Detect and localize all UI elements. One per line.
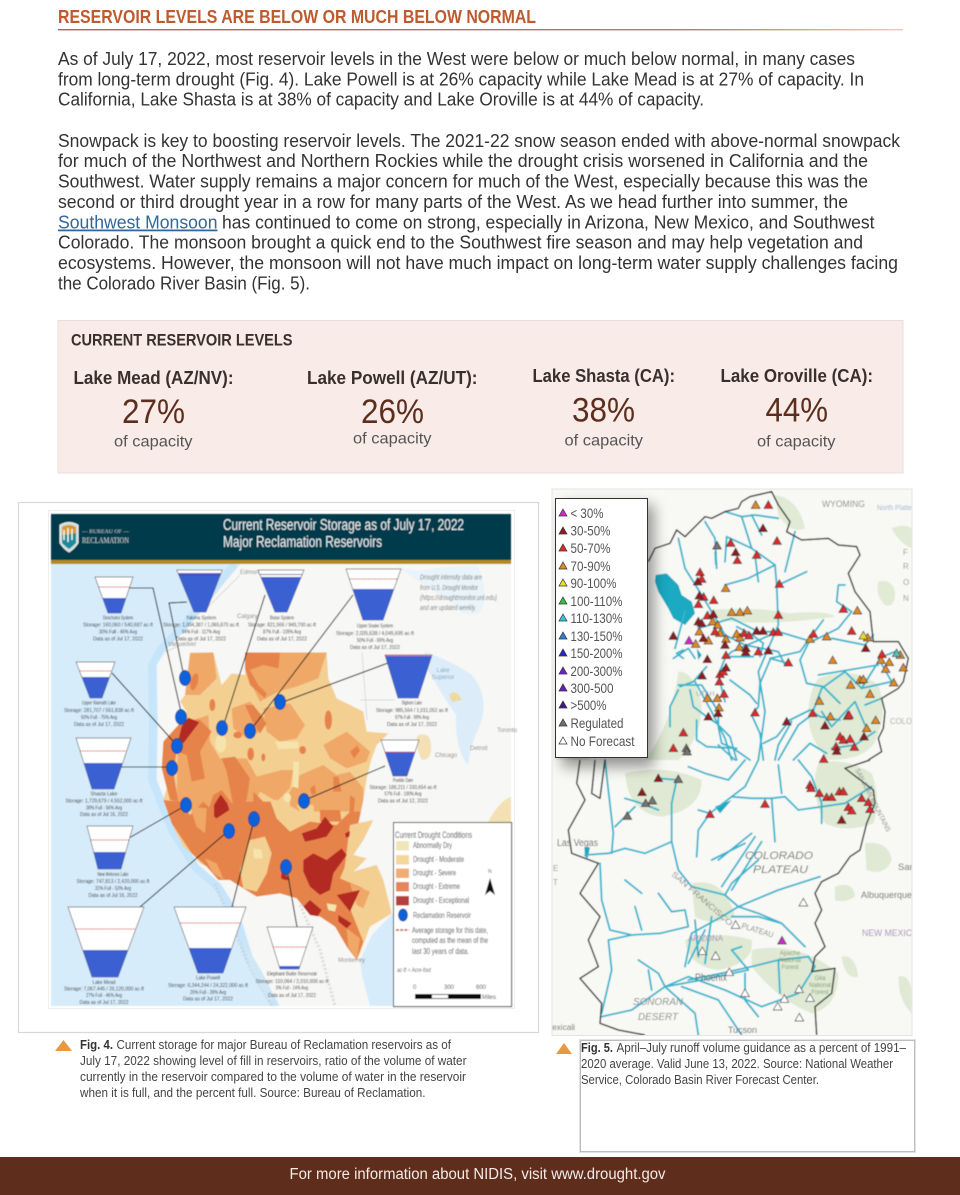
figure 4 caption: July 17, 2022 showing level of fill in reservoirs, ratio of the volume of water — [80, 1054, 466, 1068]
figure 5: runoff volume map — [552, 489, 915, 1036]
funnel: Upper Snake System: Data as of Jul 17, 2022 — [350, 645, 400, 651]
map place names: Forest — [781, 965, 799, 971]
legend: current drought conditions: Drought - Moderate — [413, 854, 464, 864]
map place names: N — [903, 594, 909, 603]
funnel: Upper Snake System: 50% Full - 69% Avg — [357, 638, 393, 644]
legend: current drought conditions: Current Drought Conditions — [395, 830, 472, 840]
drought data note: (https://droughtmonitor.unl.edu) — [420, 595, 497, 602]
legend: current drought conditions: Miles — [482, 995, 496, 1001]
funnel: Deschutes System: Storage: 160,060 / 540,687 ac-ft — [83, 622, 153, 628]
funnel: Upper Klamath Lake: Upper Klamath Lake — [82, 700, 116, 706]
funnel: Upper Klamath Lake: Storage: 281,707 / 561,838 ac-ft — [64, 708, 134, 714]
panel heading: CURRENT RESERVOIR LEVELS — [71, 330, 292, 350]
map place names: COLORADO — [745, 850, 813, 862]
map place labels: Vancouver — [168, 642, 196, 648]
funnel: Boise System: 87% Full - 109% Avg — [263, 630, 301, 636]
paragraph: snowpack and monsoon: Southwest Monsoon — [58, 212, 218, 232]
funnel: Elephant Butte Reservoir: Storage: 110,064 / 2,010,900 ac-ft — [256, 979, 329, 985]
stat: Lake Shasta: Lake Shasta (CA): — [532, 366, 675, 386]
logo wordmark: — BUREAU OF — — [81, 529, 130, 535]
figure 5 caption: April–July runoff volume guidance as a percent of 1991– — [616, 1041, 906, 1055]
map title — [223, 517, 464, 551]
funnel: Deschutes System — [83, 577, 153, 642]
funnel: Bighorn Lake: 97% Full - 98% Avg — [395, 715, 429, 721]
map place names: Apache — [780, 951, 801, 957]
funnel: Lake Powell: 26% Full - 39% Avg — [190, 990, 226, 996]
section title: RESERVOIR LEVELS ARE BELOW OR MUCH BELOW NORMAL — [58, 7, 536, 27]
funnel: Lake Mead — [64, 907, 144, 1006]
drought data note — [420, 574, 497, 612]
funnel: New Melones Lake: 31% Full - 53% Avg — [95, 886, 131, 892]
map title: Current Reservoir Storage as of July 17, 2022 — [223, 517, 464, 534]
stat: Lake Powell: 26% — [361, 393, 424, 431]
funnel: Pueblo Dam: Pueblo Dam — [393, 778, 413, 784]
map place names: NEW MEXIC — [862, 928, 912, 938]
paragraph: reservoir levels: California, Lake Shasta is at 38% of capacity and Lake Oroville is at 44% of capacity. — [58, 90, 704, 110]
legend: current drought conditions: ac-ft = Acre-foot — [397, 968, 431, 974]
funnel: Shasta Lake — [66, 738, 143, 818]
funnel: New Melones Lake — [76, 826, 150, 899]
footer bar — [0, 1157, 960, 1195]
drought area — [161, 652, 392, 960]
legend: runoff percent of average: 100-110% — [570, 593, 622, 609]
funnel: Upper Snake System — [336, 569, 414, 651]
paragraph: reservoir levels: As of July 17, 2022, most reservoir levels in the West were below or much below normal, in many cases — [58, 49, 855, 69]
map place labels: Superior — [432, 675, 454, 681]
legend: current drought conditions: Drought - Exceptional — [413, 895, 469, 905]
funnel: Pueblo Dam: Storage: 188,211 / 330,654 ac-ft — [370, 785, 437, 791]
funnel: Shasta Lake: Data as of Jul 16, 2022 — [80, 812, 128, 818]
panel: current reservoir levels — [58, 320, 903, 473]
forecast markers, upper basin — [669, 501, 908, 762]
icon: caption triangle — [556, 1043, 572, 1054]
footer bar: For more information about NIDIS, visit www.drought.gov — [290, 1166, 666, 1183]
drought data note: from U.S. Drought Monitor — [420, 585, 478, 592]
map place names: WYOMING — [822, 499, 865, 509]
funnel: Shasta Lake: Shasta Lake — [90, 792, 118, 798]
figure 5 caption: Fig. 5. — [581, 1041, 613, 1055]
map place names: PLATEAU — [753, 864, 808, 876]
map place names: Gila — [815, 976, 826, 982]
funnel: New Melones Lake: Data as of Jul 16, 2022 — [88, 893, 138, 899]
drought data note: Drought intensity data are — [420, 574, 482, 582]
logo wordmark: RECLAMATION — [82, 536, 129, 545]
funnel: Lake Powell: Storage: 6,344,244 / 24,322,000 ac-ft — [168, 983, 248, 989]
legend: current drought conditions — [394, 822, 512, 1006]
funnel: Upper Klamath Lake: 50% Full - 75% Avg — [81, 715, 117, 721]
legend: runoff percent of average: 110-130% — [570, 610, 622, 626]
funnel: New Melones Lake: New Melones Lake — [98, 872, 128, 878]
map place names: exicali — [552, 1022, 575, 1032]
legend: runoff percent of average: 130-150% — [570, 628, 622, 644]
legend: runoff percent of average: 90-100% — [570, 575, 616, 591]
funnel: Yakima System: Storage: 1,004,387 / 1,065,670 ac-ft — [163, 622, 239, 628]
legend: current drought conditions: 0 — [413, 985, 417, 991]
paragraph: snowpack and monsoon: has continued to come on strong, especially in Arizona, New Mexico, and Southwest — [222, 212, 874, 232]
figure 4 caption: Fig. 4. — [80, 1038, 113, 1052]
funnel: Deschutes System: Deschutes System — [103, 616, 133, 622]
funnel: Bighorn Lake: Data as of Jul 17, 2022 — [387, 722, 437, 728]
stat: Lake Shasta: of capacity — [564, 432, 643, 450]
funnel: Upper Klamath Lake — [64, 662, 134, 728]
legend: runoff percent of average: 70-90% — [570, 558, 610, 574]
base map — [51, 564, 512, 1006]
map place labels: Monterrey — [338, 958, 365, 964]
paragraph: snowpack and monsoon — [58, 131, 901, 294]
funnel: Upper Klamath Lake: Data as of Jul 17, 2022 — [74, 722, 124, 728]
funnel: Elephant Butte Reservoir: Elephant Butte Reservoir — [267, 972, 317, 978]
legend: current drought conditions: 300 — [444, 985, 455, 991]
map place names: SAN JUAN MOUNTAINS — [853, 768, 891, 834]
funnel: Bighorn Lake: Bighorn Lake — [402, 700, 422, 706]
paragraph: snowpack and monsoon: for much of the Northwest and Northern Rockies while the drought crisis worsened in California and the — [58, 151, 868, 171]
stat: Lake Mead: of capacity — [114, 434, 192, 450]
funnel: Shasta Lake: 38% Full - 56% Avg — [86, 806, 122, 812]
funnel: Boise System: Data as of Jul 17, 2022 — [257, 636, 307, 642]
funnel: Yakima System: Yakima System — [186, 616, 216, 622]
map place names: National — [779, 958, 801, 964]
map place names: National — [809, 983, 831, 989]
figure 4 caption: currently in the reservoir compared to the volume of water in the reservoir — [80, 1070, 466, 1084]
funnel: Lake Powell: Data as of Jul 17, 2022 — [183, 996, 233, 1002]
funnel: Boise System: Storage: 821,566 / 949,700 ac-ft — [248, 622, 316, 628]
reservoir leader lines — [112, 588, 388, 927]
legend: runoff percent of average: 50-70% — [570, 540, 610, 556]
funnel: Deschutes System: 30% Full - 46% Avg — [99, 630, 137, 636]
map place names: UTAH — [696, 691, 715, 698]
stat: Lake Powell: of capacity — [353, 430, 432, 448]
map place names: F — [903, 548, 908, 557]
funnel: Bighorn Lake — [376, 655, 448, 728]
map place names: ARIZONA — [688, 934, 724, 943]
map place labels: Chicago — [435, 753, 458, 759]
legend: runoff percent of average: 150-200% — [570, 645, 622, 661]
funnel: Yakima System: 94% Full - 117% Avg — [182, 630, 220, 636]
stat: Lake Oroville: of capacity — [757, 434, 836, 450]
paragraph: snowpack and monsoon: Southwest. Water supply remains a major concern for much of the West, especially because this was the — [58, 172, 868, 192]
funnel: Upper Snake System: Storage: 2,035,638 / 4,045,695 ac-ft — [336, 631, 414, 637]
funnel: Elephant Butte Reservoir: Data as of Jul 17, 2022 — [268, 993, 316, 999]
figure 5 caption: 2020 average. Valid June 13, 2022. Source: National Weather — [581, 1057, 893, 1071]
funnel: Yakima System: Data as of Jul 17, 2022 — [176, 636, 226, 642]
map place labels: Detroit — [470, 746, 488, 752]
funnel: Lake Powell: Lake Powell — [196, 976, 220, 982]
funnel: Deschutes System: Data as of Jul 17, 2022 — [93, 636, 143, 642]
paragraph: snowpack and monsoon: Snowpack is key to boosting reservoir levels. The 2021-22 snow season ended with above-normal snowpack — [58, 131, 901, 151]
funnel: Elephant Butte Reservoir: 5% Full - 14% Avg — [276, 986, 308, 992]
central rivers detail — [670, 620, 840, 760]
map place names: San — [898, 862, 915, 873]
legend: runoff percent of average: < 30% — [570, 505, 604, 521]
stat: Lake Mead: Lake Mead (AZ/NV): — [74, 368, 234, 388]
legend: runoff percent of average: Regulated — [570, 715, 624, 731]
map place labels: Lake — [436, 668, 450, 674]
paragraph: reservoir levels: from long-term drought (Fig. 4). Lake Powell is at 26% capacity while Lake Mead is at 27% of capacity. In — [58, 70, 864, 90]
legend: runoff percent of average: 200-300% — [570, 663, 622, 679]
figure 5 caption: Service, Colorado Basin River Forecast Center. — [581, 1073, 819, 1087]
paragraph: snowpack and monsoon: Colorado. The monsoon brought a quick end to the Southwest fire season and may help vegetation and — [58, 232, 863, 252]
legend: current drought conditions: Drought - Extreme — [413, 881, 460, 891]
legend: current drought conditions: N — [488, 869, 492, 875]
map place labels — [168, 570, 518, 964]
map place names: COLO — [890, 717, 912, 726]
legend: current drought conditions: computed as the mean of the — [412, 935, 488, 945]
legend: current drought conditions: Reclamation Reservoir — [413, 910, 471, 920]
stat: Lake Shasta: 38% — [572, 392, 635, 430]
reservoir location dots — [166, 670, 310, 874]
funnel: Lake Powell — [168, 907, 248, 1002]
funnel: Shasta Lake: Storage: 1,729,679 / 4,552,000 ac-ft — [66, 798, 143, 804]
stat: Lake Oroville: Lake Oroville (CA): — [720, 366, 873, 386]
legend: runoff percent of average: >500% — [570, 697, 606, 713]
map place names: North Platte — [877, 505, 912, 512]
paragraph: reservoir levels — [58, 49, 864, 110]
map header band — [51, 514, 511, 564]
funnel: Pueblo Dam: Data as of Jul 12, 2022 — [378, 798, 428, 804]
funnel: Boise System — [248, 570, 316, 642]
map place labels: Toronto — [497, 728, 518, 734]
icon: Reclamation shield logo — [60, 522, 78, 552]
funnel: Lake Mead: Data as of Jul 17, 2022 — [80, 1000, 128, 1006]
paragraph: snowpack and monsoon: ecosystems. However, the monsoon will not have much impact on long-term water supply challenges facing — [58, 253, 898, 273]
map place names: Albuquerque — [861, 890, 912, 900]
map place names: SAN FRANCISCO — [670, 870, 734, 928]
figure 4 caption — [55, 1038, 466, 1100]
funnel: Lake Mead: 27% Full - 46% Avg — [86, 993, 122, 999]
legend: runoff percent of average — [556, 498, 648, 758]
funnel: Lake Mead: Lake Mead — [92, 980, 116, 986]
icon: caption triangle — [55, 1040, 72, 1051]
funnel: Boise System: Boise System — [270, 616, 294, 622]
funnel: Pueblo Dam: 57% Full - 100% Avg — [384, 792, 422, 798]
stat: Lake Powell — [307, 368, 478, 448]
stat: Lake Oroville — [720, 366, 873, 450]
map place names: Las Vegas — [557, 838, 598, 849]
map place names: SONORAN — [633, 997, 684, 1008]
funnel: Elephant Butte Reservoir — [256, 927, 329, 999]
map place names: PLATEAU — [740, 921, 775, 940]
legend: current drought conditions: Abnormally Dry — [413, 840, 452, 850]
stat: Lake Shasta — [532, 366, 675, 450]
map place names: Tucson — [728, 1025, 757, 1036]
terrain and rivers, lower basin — [568, 760, 912, 1035]
drought data note: and are updated weekly. — [420, 605, 476, 612]
stat: Lake Mead: 27% — [122, 393, 185, 431]
stat: Lake Mead — [74, 368, 234, 450]
map place names: T — [553, 878, 558, 887]
legend: runoff percent of average: 300-500 — [570, 680, 614, 696]
map place names: O — [903, 578, 909, 587]
map place names: E — [553, 864, 558, 873]
funnel: Bighorn Lake: Storage: 985,564 / 1,011,052 ac-ft — [376, 708, 448, 714]
funnel: Lake Mead: Storage: 7,067,445 / 26,120,000 ac-ft — [64, 986, 144, 992]
stat: Lake Oroville: 44% — [766, 392, 828, 430]
map place names — [552, 499, 915, 1036]
map title: Major Reclamation Reservoirs — [223, 534, 382, 551]
paragraph: snowpack and monsoon: second or third drought year in a row for many parts of the West. As we head further into summer, the — [58, 192, 848, 212]
terrain and rivers, upper basin — [555, 492, 912, 760]
map place labels: Edmonton — [240, 570, 267, 576]
legend: runoff percent of average: No Forecast — [570, 733, 635, 749]
legend: current drought conditions: Drought - Severe — [413, 868, 456, 878]
legend: current drought conditions: Average storage for this date, — [412, 925, 488, 935]
forecast markers, lower basin — [623, 774, 874, 1021]
legend: current drought conditions: last 30 years of data. — [412, 946, 469, 956]
map place names: Phoenix — [695, 972, 727, 984]
figure 4 caption: when it is full, and the percent full. Source: Bureau of Reclamation. — [79, 1086, 426, 1100]
map legend shadow — [562, 505, 654, 767]
funnel: Pueblo Dam — [370, 740, 437, 804]
funnel: New Melones Lake: Storage: 747,813 / 2,420,000 ac-ft — [76, 879, 150, 885]
map place labels: Calgary — [237, 614, 258, 620]
funnel: Upper Snake System: Upper Snake System — [357, 624, 393, 630]
funnel: Yakima System — [163, 570, 239, 642]
map place names: R — [903, 562, 909, 571]
figure 4: reservoir storage map — [18, 502, 538, 1032]
map place names: Forest — [811, 990, 829, 996]
logo wordmark — [81, 529, 130, 545]
legend: runoff percent of average: 30-50% — [570, 522, 610, 538]
stat: Lake Powell: Lake Powell (AZ/UT): — [307, 368, 478, 388]
figure 4 caption: Current storage for major Bureau of Reclamation reservoirs as of — [116, 1038, 451, 1052]
paragraph: snowpack and monsoon: the Colorado River Basin (Fig. 5). — [58, 274, 310, 294]
map place names: DESERT — [638, 1012, 679, 1023]
legend: current drought conditions: 600 — [476, 985, 487, 991]
figure 5 caption — [556, 1040, 916, 1152]
